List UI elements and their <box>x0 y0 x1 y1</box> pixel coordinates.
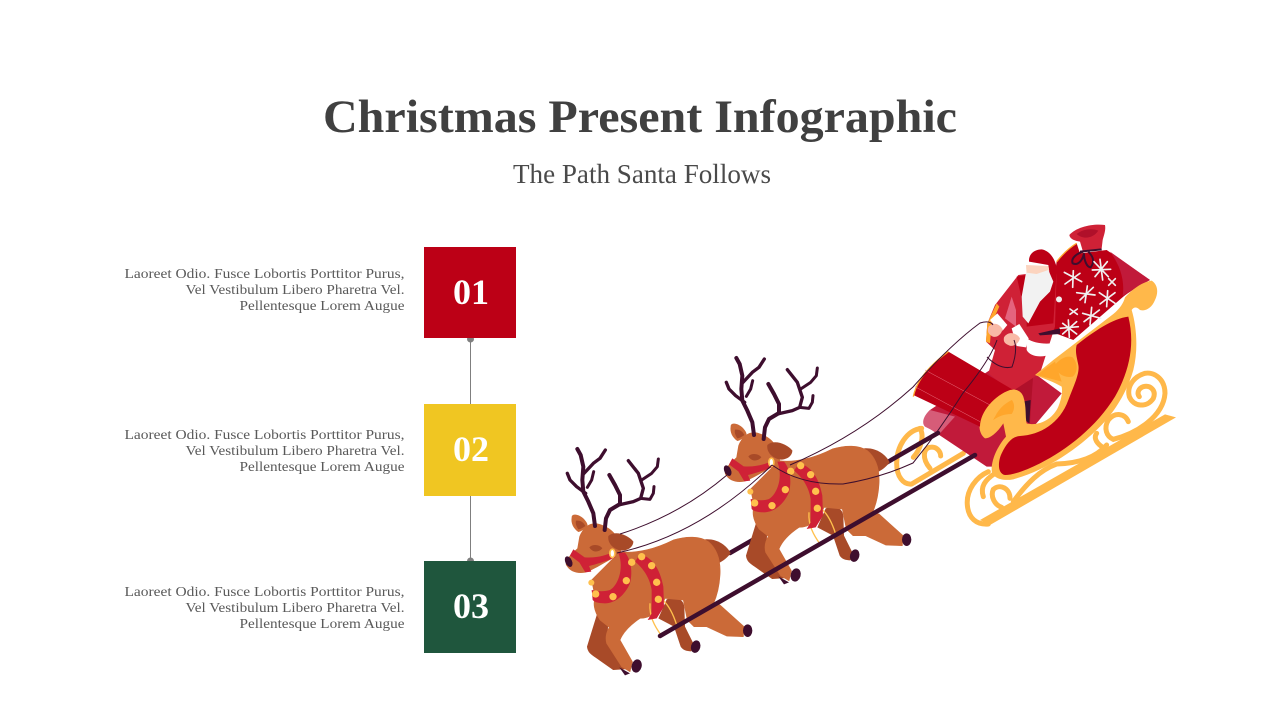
step 03 text: Laoreet Odio. Fusce Lobortis Porttitor Purus, <box>124 585 404 600</box>
step 01 text: Laoreet Odio. Fusce Lobortis Porttitor Purus, <box>124 267 404 282</box>
harness bar: front <box>660 455 975 636</box>
step 03 number: 03 <box>453 586 489 626</box>
snowflakes <box>1060 259 1115 337</box>
harness bar: back <box>730 433 938 553</box>
step 01 text: Pellentesque Lorem Augue <box>240 299 404 314</box>
step 02 number: 02 <box>453 429 489 469</box>
connector: 01 to 02 <box>467 336 474 404</box>
step 02 text: Pellentesque Lorem Augue <box>240 460 404 475</box>
step 02 <box>124 404 516 496</box>
step 01 <box>124 247 516 338</box>
title: Christmas Present Infographic <box>323 91 957 143</box>
step 03 box <box>424 561 516 653</box>
step 03 text: Vel Vestibulum Libero Pharetra Vel. <box>186 601 404 616</box>
connector: 02 to 03 <box>467 496 474 564</box>
sleigh hull <box>979 281 1157 480</box>
reins <box>617 322 1016 553</box>
near runner <box>967 373 1176 525</box>
Santa <box>986 249 1065 423</box>
step 02 box <box>424 404 516 496</box>
step 01 text: Vel Vestibulum Libero Pharetra Vel. <box>186 283 404 298</box>
gift sack <box>1047 225 1150 340</box>
step 02 text: Laoreet Odio. Fusce Lobortis Porttitor Purus, <box>124 428 404 443</box>
illustration: sleigh with Santa <box>897 225 1176 525</box>
reindeer: rear <box>722 358 911 584</box>
subtitle: The Path Santa Follows <box>513 159 771 189</box>
front dash <box>913 352 1021 427</box>
step 03 <box>124 561 516 653</box>
reindeer: front <box>563 449 752 675</box>
step 01 text <box>124 267 404 314</box>
step 03 text <box>124 585 404 632</box>
far runner <box>897 428 963 484</box>
footwell <box>924 370 1062 467</box>
step 02 text <box>124 428 404 475</box>
step 01 box <box>424 247 516 338</box>
step 01 number: 01 <box>453 272 489 312</box>
step 02 text: Vel Vestibulum Libero Pharetra Vel. <box>186 444 404 459</box>
step 03 text: Pellentesque Lorem Augue <box>240 617 404 632</box>
